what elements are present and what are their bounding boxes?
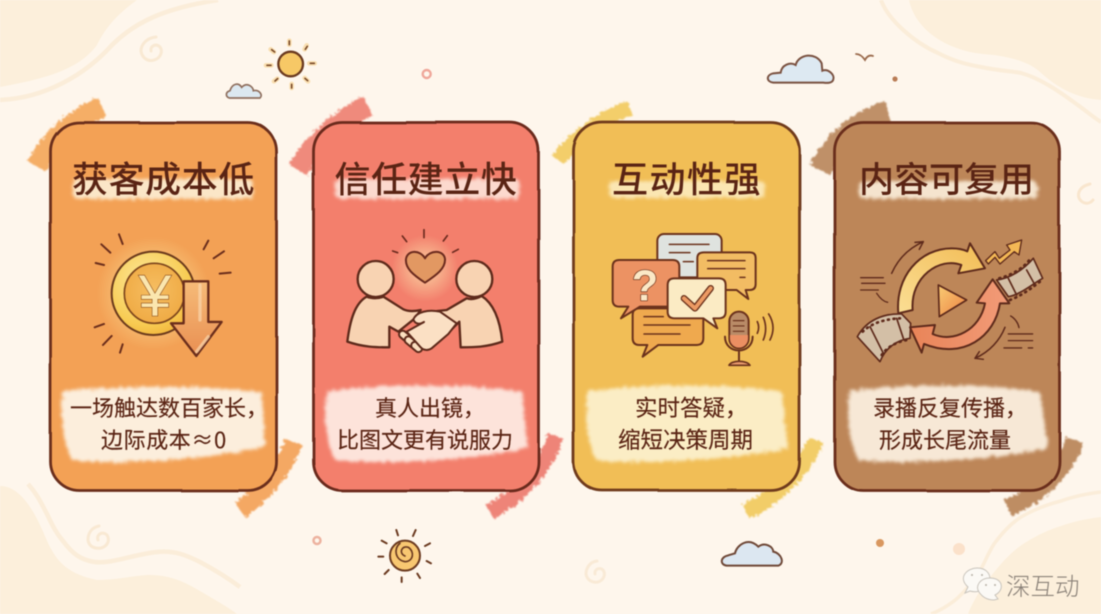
description highlight [848,386,1048,462]
icon: coin with down arrow: ¥ [138,263,172,328]
icon: small cloud top [226,84,261,98]
icon: sun top [266,41,315,88]
panel: 互动性强 [574,122,800,490]
description: 录播反复传播， [873,396,1027,421]
icon: handshake and heart [347,230,502,354]
card background [314,122,538,490]
heading highlight [859,181,1037,199]
icon: wechat [963,568,1001,600]
icon: chat bubbles and microphone [613,234,773,365]
heading: 获客成本低 [72,159,255,200]
icon: bird [856,54,873,60]
watermark [963,568,1080,601]
description: 比图文更有说服力 [337,428,513,453]
icon: coin with down arrow [95,234,231,356]
watermark text: 深互动 [1006,573,1080,601]
description: 实时答疑， [635,396,748,421]
heading highlight [73,179,253,199]
icon: chat bubbles and microphone: ? [632,263,658,311]
description highlight [586,386,788,462]
panel: 获客成本低 [50,122,276,490]
decorative dots [314,76,965,555]
description: 缩短决策周期 [618,428,753,453]
brush strokes behind cards [36,106,1075,512]
icon: replay arrows and film [857,240,1043,362]
card background [574,122,800,490]
panel: 信任建立快 [314,122,538,490]
panel: 内容可复用 [834,122,1060,490]
heading: 互动性强 [612,159,762,200]
icon: cloud top right [768,56,834,83]
heading: 信任建立快 [334,159,518,200]
description highlight [325,386,528,462]
heading highlight [609,181,765,198]
heading: 内容可复用 [859,161,1034,200]
icon: swirl sun bottom [378,530,431,582]
description: 形成长尾流量 [879,428,1011,453]
icon: cloud bottom [722,542,782,566]
icon: ring top [423,70,431,78]
card background [50,122,276,490]
description: 真人出镜， [375,396,485,421]
card background [834,122,1060,490]
heading highlight [335,179,520,199]
description: 边际成本≈0 [101,423,227,455]
description highlight [62,387,265,462]
description: 一场触达数百家长， [70,396,268,421]
